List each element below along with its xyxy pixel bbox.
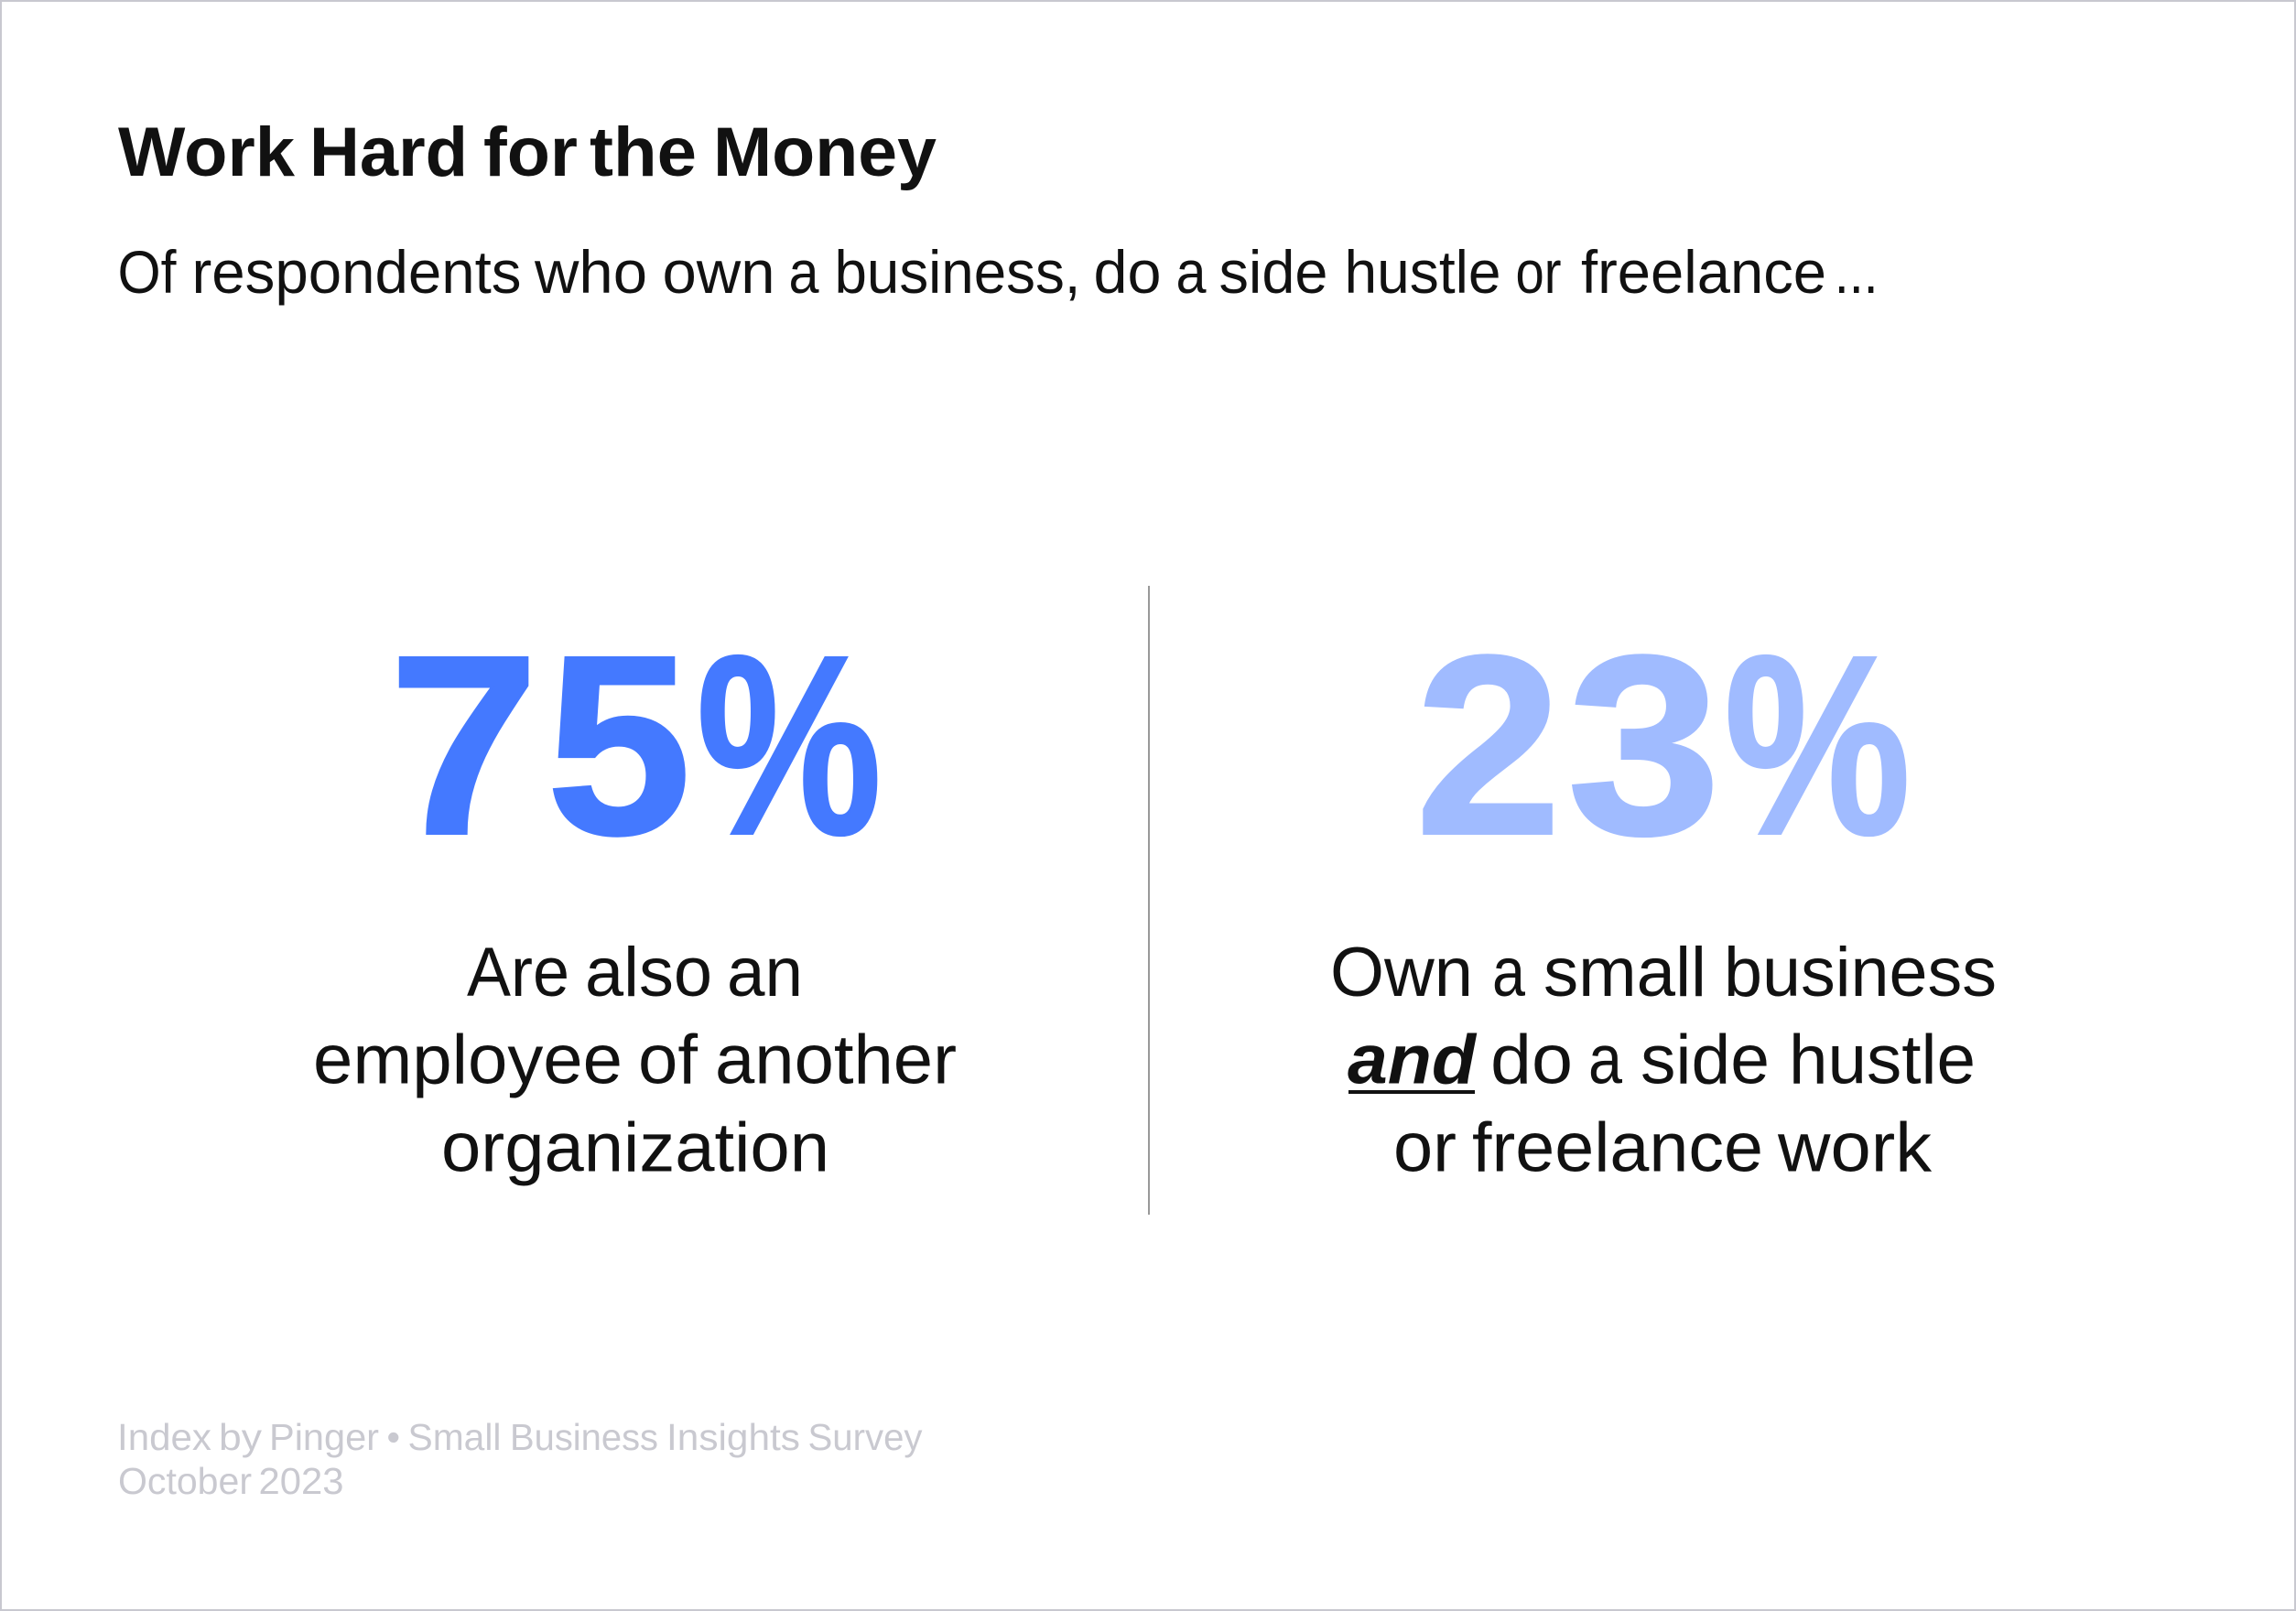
title: Work [118, 114, 296, 191]
subtitle: freelance [1581, 238, 1826, 306]
big number: 75%: 5 [547, 602, 691, 888]
big number: 23%: 3 [1567, 602, 1721, 888]
source footer: October [118, 1460, 252, 1502]
description: small business and side hustle [1330, 934, 1997, 1186]
source footer: Small [408, 1416, 502, 1458]
source footer: Survey [807, 1416, 923, 1458]
subtitle: do [1093, 238, 1161, 306]
vertical divider [1148, 586, 1150, 1215]
big number: 23%: % [1724, 603, 1911, 889]
description: employee of another organization: an [727, 934, 803, 1011]
source footer: Insights [666, 1416, 800, 1458]
source footer: Index [117, 1416, 211, 1458]
subtitle: who [534, 238, 647, 306]
description: small business and side hustle: business [1724, 934, 1997, 1011]
subtitle: hustle [1344, 238, 1501, 306]
source footer: 2023 [258, 1460, 344, 1502]
big number: 23% [1415, 602, 1911, 889]
description: employee of another organization: of [638, 1022, 699, 1098]
source footer: Business [510, 1416, 658, 1458]
big number: 23%: 2 [1415, 603, 1562, 889]
title: Hard [309, 114, 468, 191]
description: small business and side hustle: do [1490, 1022, 1573, 1098]
source footer: • [386, 1416, 400, 1458]
subtitle: own [663, 238, 774, 306]
title [118, 114, 937, 191]
subtitle: or [1516, 238, 1562, 306]
description: employee of another organization: organization [441, 1109, 829, 1186]
subtitle [117, 238, 1879, 306]
description: small business and side hustle: side [1641, 1022, 1770, 1098]
subtitle: business, [835, 238, 1080, 306]
description: small business and side hustle: a [1492, 934, 1526, 1011]
title: the [590, 114, 697, 191]
panel: 75 percent stat [313, 602, 957, 1186]
description: employee of another organization: another [715, 1022, 957, 1098]
big number: 75% [389, 602, 882, 888]
description: employee of another organization: Are [467, 934, 569, 1011]
title: for [483, 114, 578, 191]
subtitle: a [789, 238, 819, 306]
description: employee of another organization [313, 934, 957, 1186]
subtitle: Of [117, 238, 177, 306]
subtitle: a [1175, 238, 1207, 306]
title: Money [713, 114, 937, 191]
subtitle: side [1219, 238, 1327, 306]
subtitle: ... [1835, 238, 1879, 306]
description: small business and side hustle: freelance [1472, 1109, 1763, 1186]
source footer: by [219, 1416, 263, 1458]
source footer: Pinger [269, 1416, 379, 1458]
big number: 75%: 7 [389, 602, 539, 888]
description: small business and side hustle: work [1777, 1109, 1933, 1186]
subtitle: respondents [192, 238, 522, 306]
description: small business and side hustle: or [1393, 1109, 1457, 1186]
description: employee of another organization: employee [313, 1022, 623, 1098]
panel: 23 percent stat [1330, 602, 1997, 1186]
description: small business and side hustle: small [1543, 934, 1706, 1011]
description: employee of another organization: also [585, 934, 712, 1011]
description: small business and side hustle: Own [1330, 934, 1473, 1011]
description: small business and side hustle: and [1348, 1022, 1478, 1098]
source footer [117, 1416, 923, 1502]
description: small business and side hustle: a [1588, 1022, 1623, 1098]
description: small business and side hustle: hustle [1789, 1022, 1976, 1098]
big number: 75%: % [697, 602, 882, 888]
